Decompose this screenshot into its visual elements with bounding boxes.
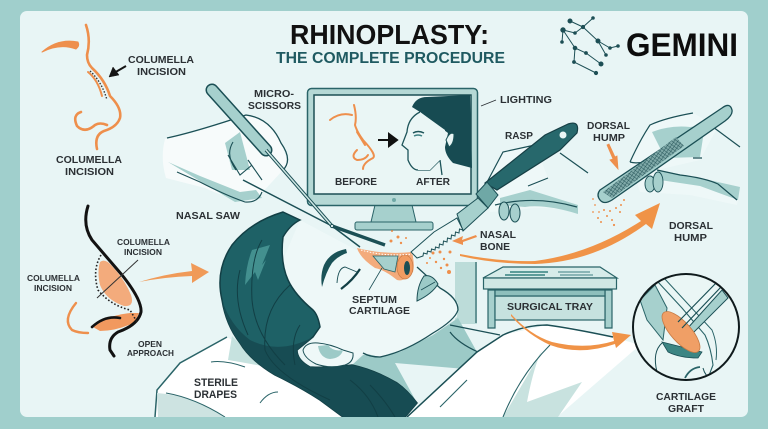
label: dorsal hump upper: HUMP xyxy=(593,133,625,144)
particles: dorsal dust xyxy=(592,198,625,226)
label: micro-scissors: SCISSORS xyxy=(248,101,301,112)
label: columella incision lower xyxy=(56,156,122,175)
label: micro-scissors: MICRO- xyxy=(254,89,294,100)
label: surgical tray: SURGICAL TRAY xyxy=(507,301,593,313)
dotted incision line xyxy=(90,71,107,100)
rasp and nasal saw tool xyxy=(411,123,578,258)
label: dorsal hump upper: DORSAL xyxy=(587,121,630,132)
label: columella incision lower: INCISION xyxy=(65,167,114,178)
graft: cartilage piece xyxy=(656,306,706,358)
label: columella incision left xyxy=(27,275,80,291)
label: nasal bone: NASAL xyxy=(480,229,517,241)
icon: gemini constellation xyxy=(561,17,619,75)
arrow: tray to cartilage graft xyxy=(511,314,631,350)
particles: nasal dust xyxy=(390,230,452,274)
arrow: big orange curve to dorsal hump xyxy=(460,203,660,264)
label: septum cartilage xyxy=(349,296,410,314)
cartilage graft inset xyxy=(633,274,739,380)
monitor: after label: AFTER xyxy=(416,177,451,188)
arrow: dorsal hump pointer xyxy=(607,144,618,169)
label: columella incision centre xyxy=(117,239,170,255)
lips xyxy=(417,276,438,301)
label: nasal bone xyxy=(480,229,517,253)
label: columella incision centre: COLUMELLA xyxy=(117,237,170,247)
ear xyxy=(303,343,353,367)
label: open approach: APPROACH xyxy=(127,348,174,358)
hand holding file xyxy=(630,113,740,205)
label: cartilage graft: GRAFT xyxy=(668,404,704,415)
label: columella incision centre: INCISION xyxy=(124,247,162,257)
drape: right blanket xyxy=(407,325,640,417)
label: open approach: OPEN xyxy=(138,339,162,349)
label: columella incision lower: COLUMELLA xyxy=(56,155,122,166)
label: dorsal hump lower: DORSAL xyxy=(669,221,713,232)
icon: open approach nose diagram xyxy=(68,206,141,356)
file tool xyxy=(598,105,732,202)
label: sterile drapes xyxy=(194,378,238,398)
monitor: after profile xyxy=(402,95,472,175)
label: columella incision top: COLUMELLA xyxy=(128,55,194,66)
label: columella incision top: INCISION xyxy=(137,67,186,78)
micro-scissors xyxy=(212,90,385,247)
label: sterile drapes: DRAPES xyxy=(194,389,237,401)
heading: subtitle: THE COMPLETE PROCEDURE xyxy=(276,50,505,67)
icon: orange nose diagram xyxy=(42,25,120,149)
label: cartilage graft xyxy=(656,392,716,415)
arrow: nasal bone pointer xyxy=(452,235,477,245)
neck shadow xyxy=(352,318,477,403)
graft: forceps xyxy=(686,290,728,334)
arrow: orange to patient xyxy=(139,263,209,283)
monitor: before label: BEFORE xyxy=(335,177,377,188)
heading: gemini logo: GEMINI xyxy=(626,27,738,63)
label: micro-scissors xyxy=(248,90,301,109)
surgical tray xyxy=(455,262,617,328)
face xyxy=(370,302,458,356)
label: columella incision left: COLUMELLA xyxy=(27,273,80,283)
monitor: before nose xyxy=(330,105,374,169)
monitor: arrow xyxy=(378,134,397,146)
label: rasp: RASP xyxy=(505,131,533,142)
label: dorsal hump lower: HUMP xyxy=(674,233,707,244)
label: lighting: LIGHTING xyxy=(500,95,552,106)
label: dorsal hump lower xyxy=(669,221,713,244)
label: nasal bone: BONE xyxy=(480,241,510,253)
label: septum cartilage: SEPTUM xyxy=(352,294,397,306)
label: nasal saw: NASAL SAW xyxy=(176,210,240,222)
hand holding micro-scissors xyxy=(163,115,289,202)
hair xyxy=(220,212,417,417)
heading: title: RHINOPLASTY: xyxy=(290,19,489,50)
monitor xyxy=(308,88,478,230)
label: columella incision top xyxy=(128,56,194,75)
label: septum cartilage: CARTILAGE xyxy=(349,305,410,317)
hand holding rasp xyxy=(485,145,588,222)
label: open approach xyxy=(127,341,174,356)
arrow: incision pointer xyxy=(109,66,126,77)
patient xyxy=(220,212,458,417)
label: sterile drapes: STERILE xyxy=(194,377,238,389)
label: dorsal hump upper xyxy=(587,121,630,144)
label: cartilage graft: CARTILAGE xyxy=(656,392,716,403)
graft: tissue xyxy=(640,285,667,340)
brow and eye xyxy=(321,249,347,287)
drape: left sterile drapes xyxy=(155,336,350,417)
nose graft anatomy xyxy=(357,248,414,280)
label: columella incision left: INCISION xyxy=(34,283,72,293)
label: lighting xyxy=(481,95,552,106)
